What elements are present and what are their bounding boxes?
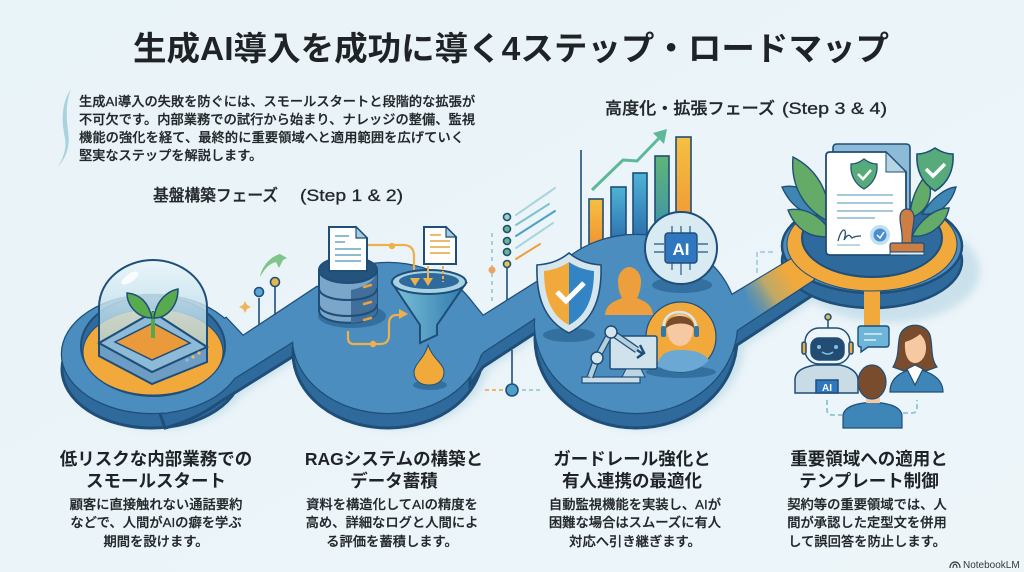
intro text block: 不可欠です。内部業務での試行から始まり、ナレッジの整備、監視 xyxy=(79,111,475,127)
phase heading: advanced: (Step 3 & 4) xyxy=(782,100,887,118)
icon: robot: AI xyxy=(822,383,832,394)
step 3 caption: 自動監視機能を実装し、AIが xyxy=(549,496,721,512)
phase heading: advanced xyxy=(605,98,887,118)
intro text block: 生成AI導入の失敗を防ぐには、スモールスタートと段階的な拡張が xyxy=(79,93,475,109)
step 3 caption: 対応へ引き継ぎます。 xyxy=(569,534,701,549)
step 1 caption xyxy=(60,449,252,549)
step 4 caption xyxy=(787,449,948,549)
step 1 caption: などで、人間がAIの癖を学ぶ xyxy=(70,514,242,530)
step 2 caption: 資料を構造化してAIの精度を xyxy=(306,497,478,512)
platform shadow xyxy=(70,219,980,429)
step 1 caption: 低リスクな内部業務での xyxy=(60,449,252,469)
icon: database with document xyxy=(318,227,386,328)
intro text block: 堅実なステップを解説します。 xyxy=(79,147,262,163)
intro text block: 機能の強化を経て、最終的に重要領域へと適用範囲を広げていく xyxy=(79,129,464,145)
step 4 caption: 契約等の重要領域では、人 xyxy=(787,496,947,512)
icon: shield xyxy=(537,253,601,342)
step 4 caption: 重要領域への適用と xyxy=(790,449,948,469)
step 2 caption: RAGシステムの構築と xyxy=(305,449,483,469)
phase heading: foundation xyxy=(153,185,403,205)
phase heading: advanced: 高度化・拡張フェーズ xyxy=(605,98,775,118)
step 2 caption: 高め、詳細なログと人間によ xyxy=(306,514,478,530)
icon: support operator xyxy=(646,302,716,378)
orange ring on platform 4 xyxy=(787,197,957,327)
connector: checklist dots xyxy=(488,188,555,303)
step 1 caption: 期間を設けます。 xyxy=(103,534,209,549)
icon: funnel with document and drop xyxy=(392,227,466,390)
dashed links between people xyxy=(827,400,917,415)
step 2 caption: る評価を蓄積します。 xyxy=(326,533,458,549)
bottom connector node xyxy=(485,350,542,396)
dashed bracket xyxy=(757,252,773,273)
step 2 caption: データ蓄積 xyxy=(350,471,438,491)
intro text block xyxy=(58,89,475,167)
platform 4 base xyxy=(782,199,962,308)
step 3 caption xyxy=(549,449,721,549)
NotebookLM watermark: NotebookLM xyxy=(963,560,1020,571)
phase heading: foundation: (Step 1 & 2) xyxy=(300,187,403,205)
step 3 caption: 有人連携の最適化 xyxy=(562,471,702,491)
step 4 caption: 間が承認した定型文を併用 xyxy=(787,514,947,530)
road side extrusion xyxy=(62,250,830,428)
phase heading: foundation: 基盤構築フェーズ xyxy=(153,185,278,205)
icon: man xyxy=(843,365,902,428)
step 4 caption: テンプレート制御 xyxy=(799,471,939,491)
icon: AI chip: AI xyxy=(672,240,690,259)
step 4 caption: して誤回答を防止します。 xyxy=(788,533,946,549)
step 3 caption: 困難な場合はスムーズに有人 xyxy=(549,514,721,530)
icon: seedling terrarium xyxy=(81,260,225,396)
icon: speech bubble xyxy=(858,326,889,352)
icon: AI chip xyxy=(645,212,717,293)
step 1 caption: スモールスタート xyxy=(86,471,226,491)
bar chart with trend arrow xyxy=(581,129,691,250)
step 2 caption xyxy=(305,449,483,549)
icon: growth pins and arrow xyxy=(239,254,287,325)
icon: robot xyxy=(795,314,858,394)
icon: contract with leaves and stamp xyxy=(782,144,956,255)
icon: person xyxy=(605,267,653,315)
title: 生成AI導入を成功に導く4ステップ・ロードマップ xyxy=(133,30,889,67)
arrow connectors xyxy=(348,243,414,347)
roadway top surface xyxy=(62,235,830,413)
icon: woman xyxy=(890,325,943,392)
icon: monitor and robot arm xyxy=(582,326,657,383)
step 3 caption: ガードレール強化と xyxy=(553,449,711,469)
step 1 caption: 顧客に直接触れない通話要約 xyxy=(70,496,242,512)
